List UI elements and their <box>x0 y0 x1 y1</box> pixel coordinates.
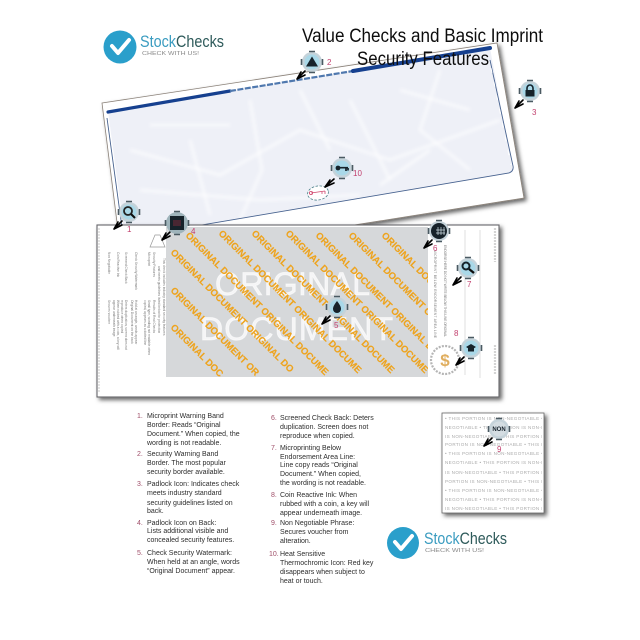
label 2: 2 <box>327 58 332 67</box>
non-negotiable sample card: • THIS PORTION IS NON-NEGOTIABLE • THIS <box>445 488 557 493</box>
left panel: security features list (rotated) <box>102 228 166 377</box>
left edge microprint <box>98 228 100 392</box>
feature list column 1: 2. <box>137 451 143 458</box>
feature list column 2: Microprinting Below <box>280 445 342 452</box>
endorsement area: ENDORSE HERE DO NOT WRITE BELOW THIS LINE ORIGINAL <box>443 245 447 337</box>
diagonal repeated ORIGINAL DOCUMENT: ORIGINAL DOCUMENT ORIGINAL DOCUM <box>313 230 456 373</box>
icon 7: magnifier <box>453 258 478 285</box>
label 6: 6 <box>433 244 438 253</box>
feature list column 1: Padlock Icon: Indicates check <box>147 481 240 488</box>
watermark: Original Document: ORIGINAL <box>215 266 370 302</box>
feature list column 1: 4. <box>137 520 143 527</box>
feature list column 2: Endorsement Area Line: <box>280 454 355 461</box>
feature list column 1: Border. The most popular <box>147 460 227 467</box>
icon 8: coin <box>456 338 482 365</box>
endorsement area <box>433 228 495 378</box>
feature list column 2: appear underneath image. <box>280 510 362 517</box>
feature list column 2: the wording is not readable. <box>280 480 366 487</box>
feature list column 2: Coin Reactive Ink: When <box>280 492 357 499</box>
icon 3: padlock <box>515 80 540 108</box>
left panel: security features list (rotated): Original Document on the back <box>130 300 134 344</box>
check background pattern <box>108 50 513 224</box>
left panel: security features list (rotated): Deters duplication, screen does not <box>124 300 128 350</box>
non-negotiable sample card: PORTION IS NON-NEGOTIABLE • THIS PORTI <box>445 479 557 484</box>
icon 5: watermark drop <box>322 296 348 324</box>
left panel: security features list (rotated): Secures voucher <box>107 300 111 325</box>
left panel: security features list (rotated): Check Security Watermark <box>134 252 138 290</box>
diagonal repeated ORIGINAL DOCUMENT: ORIGINAL DOCUMENT OR <box>168 285 261 379</box>
non-negotiable sample card <box>442 413 559 513</box>
non-negotiable sample card: PORTION IS NON-NEGOTIABLE • THIS PORTI <box>445 442 557 447</box>
feature list column 1: Border: Reads “Original <box>147 422 221 429</box>
left panel: security features list (rotated): Microprint <box>147 252 151 266</box>
title <box>302 26 544 70</box>
icon 1: magnifier on microprint border <box>114 202 140 229</box>
feature list column 2: Heat Sensitive <box>280 551 325 558</box>
non-negotiable sample card: IS NON-NEGOTIABLE • THIS PORTION IS NO <box>445 470 556 475</box>
feature list column 2: 10. <box>269 551 279 558</box>
feature list column 1: 1. <box>137 413 143 420</box>
feature list column 1: Microprint Warning Band <box>147 413 224 420</box>
logo: StockChecks top: StockChecks <box>140 33 224 51</box>
feature list column 2: 7. <box>271 445 277 452</box>
logo: StockChecks bottom: CHECK WITH US! <box>425 548 485 554</box>
diagonal repeated ORIGINAL DOCUMENT: ORIGINAL DOCUMENT ORIGINAL DOCUME <box>216 228 363 376</box>
screened grey area <box>166 227 428 377</box>
diagonal repeated ORIGINAL DOCUMENT: ORIGINAL DOCUMENT ORIGINAL DO <box>168 247 296 375</box>
feature list column 1: wording is not readable. <box>146 440 221 447</box>
feature list column 2: alteration. <box>280 538 311 545</box>
diagonal repeated ORIGINAL DOCUMENT <box>171 230 428 376</box>
endorsement area: MICROPRINT BELOW ENDORSEMENT AREA LINE <box>433 250 437 338</box>
icon 4: padlock on back <box>162 212 188 240</box>
non-negotiable sample card: • THIS PORTION IS NON-NEGOTIABLE • THIS <box>445 451 557 456</box>
left panel: security features list (rotated): This check includes industry standard security features <box>162 258 166 336</box>
feature list column 1: meets industry standard <box>147 490 222 497</box>
left panel: security features list (rotated): When rubbed with a coin, a key will <box>116 300 120 350</box>
feature list column 1: Lists additional visible and <box>147 528 228 535</box>
non-negotiable sample card: NEGOTIABLE • THIS PORTION IS NON-NEGOT <box>445 425 559 430</box>
left panel: security features list (rotated): Non Negotiable <box>107 252 111 274</box>
logo: StockChecks top: CHECK WITH US! <box>142 51 200 57</box>
feature list column 2: Secures voucher from <box>280 529 349 536</box>
diagonal repeated ORIGINAL DOCUMENT: ORIGINAL DOCUMENT ORIGINAL DOCUME <box>249 228 396 376</box>
feature list column 1: Document.” When copied, the <box>147 431 240 438</box>
feature list column 2 <box>269 415 374 585</box>
left panel: security features list (rotated): Small type, wording not readable when <box>147 300 151 355</box>
non-negotiable sample card: IS NON-NEGOTIABLE • THIS PORTION IS NO <box>445 506 556 511</box>
feature list column 1: 3. <box>137 481 143 488</box>
left panel: security features list (rotated): reproduce when copied <box>120 300 124 333</box>
feature list column 1: security guidelines listed on <box>147 500 233 507</box>
left panel: security features list (rotated): Coin Reactive Ink <box>116 252 120 277</box>
feature list column 1 <box>137 413 240 575</box>
left panel: security features list (rotated): and meets guidelines listed below for protection <box>157 266 161 333</box>
check front: value check with security border <box>101 42 530 224</box>
watermark: Original Document <box>200 266 393 347</box>
diagonal repeated ORIGINAL DOCUMENT: ORIGINAL DOCUMENT ORIGINA <box>346 230 458 342</box>
check back: card <box>97 225 499 397</box>
feature list column 1: When held at an angle, words <box>147 559 240 566</box>
security warning band <box>108 91 230 112</box>
feature list column 2: 6. <box>271 415 277 422</box>
feature list column 2: duplication. Screen does not <box>280 424 368 431</box>
feature list column 2: disappears when subject to <box>280 569 365 576</box>
logo: StockChecks bottom <box>387 527 507 559</box>
feature list column 2: 8. <box>271 492 277 499</box>
left panel: security features list (rotated): copied, appears as a dotted line <box>143 300 147 345</box>
feature list column 2: reproduce when copied. <box>280 433 355 440</box>
feature list column 2: Non Negotiable Phrase: <box>280 520 354 527</box>
feature list column 1: Check Security Watermark: <box>147 550 232 557</box>
feature list column 2: 9. <box>271 520 277 527</box>
label 7: 7 <box>467 280 472 289</box>
left panel: security features list (rotated): Security Features <box>152 252 156 277</box>
feature list column 2: Document.” When copied, <box>280 471 361 478</box>
non-negotiable sample card: NEGOTIABLE • THIS PORTION IS NON-NEGOT <box>445 460 559 465</box>
feature list column 1: back. <box>147 508 164 515</box>
feature list column 2: heat or touch. <box>280 578 323 585</box>
feature list column 2: Line copy reads “Original <box>280 462 358 469</box>
feature list column 1: “Original Document” appear. <box>147 568 235 575</box>
diagonal repeated ORIGINAL DOCUMENT: ORIGINAL DOCUMEN <box>379 230 456 308</box>
label 4: 4 <box>191 227 196 236</box>
diagonal repeated ORIGINAL DOCUMENT: ORIGINAL DOCUMENT ORIGINAL DOCUME <box>183 230 330 378</box>
diagonal repeated ORIGINAL DOCUMENT: ORIGINAL DOC <box>168 322 225 380</box>
left panel: security features list (rotated): Hold at an angle, words appear <box>134 300 138 345</box>
non-negotiable sample card: NEGOTIABLE • THIS PORTION IS NON-NEGOT <box>445 497 559 502</box>
feature list column 1: Security Warning Band <box>147 451 218 458</box>
coin reactive seal <box>431 346 459 374</box>
title: Security Features <box>357 49 489 70</box>
label 5: 5 <box>334 321 339 330</box>
watermark: Original Document: DOCUMENT <box>200 311 393 347</box>
left panel: security features list (rotated): Results of Real Checks <box>152 300 156 334</box>
title: Value Checks and Basic Imprint <box>302 26 544 47</box>
feature list column 1: security border available. <box>147 469 225 476</box>
logo: StockChecks top <box>104 30 224 64</box>
left panel: security features list (rotated): Screened Check Back <box>124 252 128 284</box>
feature list column 2: Thermochromic Icon: Red key <box>280 560 374 567</box>
thermochromic key <box>307 184 329 202</box>
icon 9: NON <box>484 418 510 446</box>
label 8: 8 <box>454 329 459 338</box>
dashed inner border <box>107 60 513 238</box>
icon 10: key <box>325 158 352 187</box>
label 3: 3 <box>532 108 537 117</box>
non-negotiable sample card: IS NON-NEGOTIABLE • THIS PORTION IS NO <box>445 434 556 439</box>
label 10: 10 <box>353 169 362 178</box>
label 1: 1 <box>127 225 132 234</box>
label 9: 9 <box>497 445 502 454</box>
icon 9: NON: NON <box>492 427 506 433</box>
left panel: security features list (rotated): appear underneath image <box>112 300 116 337</box>
logo: StockChecks bottom: StockChecks <box>424 530 507 548</box>
non-negotiable sample card: • THIS PORTION IS NON-NEGOTIABLE • THIS <box>445 416 557 421</box>
feature list column 1: 5. <box>137 550 143 557</box>
feature list column 2: rubbed with a coin, a key will <box>280 501 370 508</box>
coin reactive seal: $ <box>440 351 450 370</box>
diagonal repeated ORIGINAL DOCUMENT: ORIGINAL DOCUMENT ORIGINAL DOCUME <box>283 228 430 376</box>
icon 2: warning triangle <box>297 52 322 79</box>
feature list column 1: concealed security features. <box>147 537 234 544</box>
icon 6: screen grid <box>424 220 450 248</box>
feature list column 1: Padlock Icon on Back: <box>147 520 216 527</box>
feature list column 2: Screened Check Back: Deters <box>280 415 374 422</box>
